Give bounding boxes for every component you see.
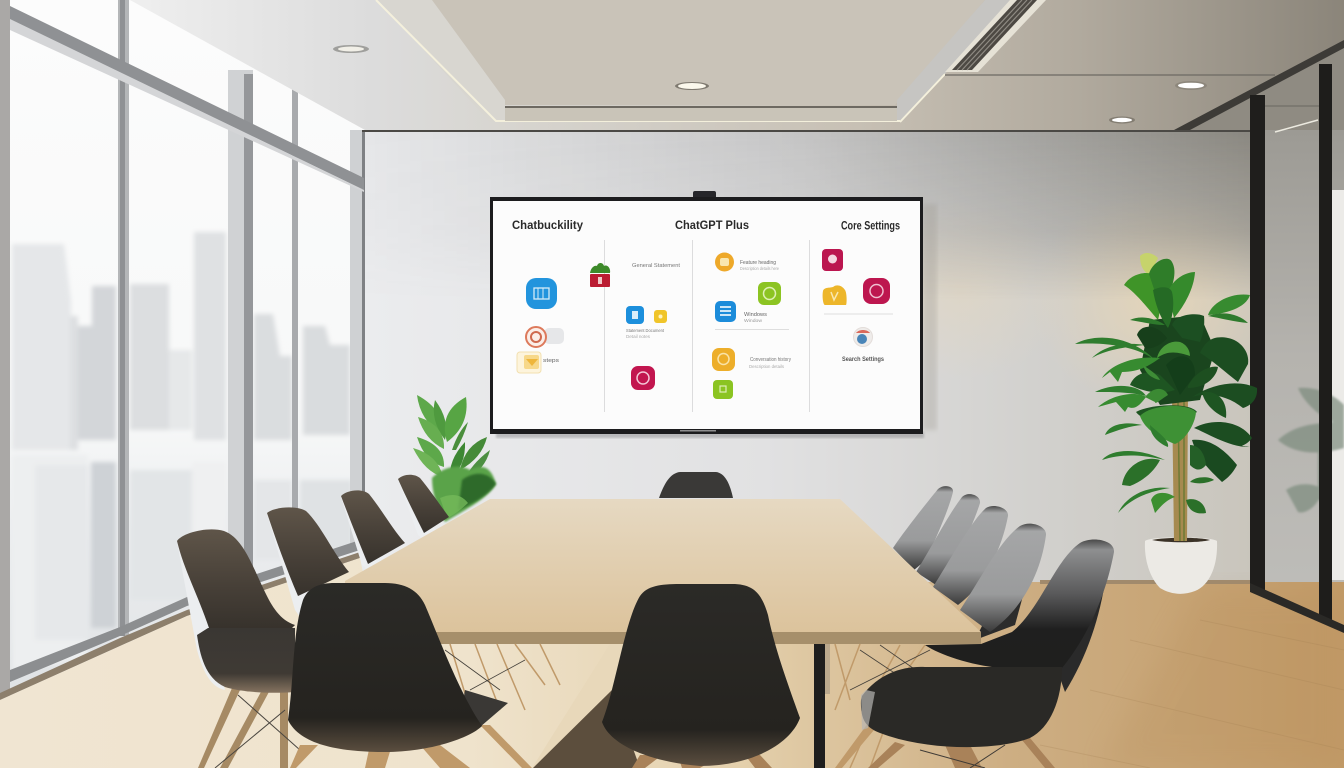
icon: blue stack [715, 301, 736, 322]
column dividers [604, 240, 810, 412]
table [344, 499, 981, 768]
back wall [365, 132, 1290, 582]
ceiling lights [333, 45, 1207, 124]
recess soffit front [505, 106, 897, 121]
chair: front center [602, 584, 800, 768]
screen content [512, 220, 900, 399]
window wall with city view [0, 0, 366, 700]
icon: yellow cup [517, 352, 541, 373]
chair: left row 2 [267, 507, 349, 620]
fronds [1075, 253, 1257, 513]
plant reflection [1278, 388, 1344, 513]
front chairs [288, 540, 1114, 768]
ceiling seam [945, 74, 1275, 76]
far side chairs [177, 472, 1046, 768]
icon: yellow home [823, 285, 847, 305]
table underside legs [532, 644, 830, 768]
label: feature two: Windows [744, 312, 768, 318]
icon: yellow key [654, 310, 667, 323]
chair: left row 3 [341, 490, 405, 572]
section rule [824, 313, 893, 315]
heading: ChatGPT Plus: ChatGPT Plus [675, 220, 749, 232]
label: feature three: Conversation history [750, 357, 791, 363]
label: general overview: General Statement [632, 263, 680, 269]
city skyline [12, 232, 352, 670]
icon: orange tile [712, 348, 735, 371]
chair: front left [288, 583, 532, 768]
black frame posts [1250, 95, 1265, 590]
label: section notes [626, 328, 665, 339]
icon: green tile [758, 282, 781, 305]
label: feature two [744, 312, 768, 323]
label: feature two: Window [744, 318, 763, 323]
icon: blue chat [526, 278, 557, 309]
label: steps: steps [543, 358, 559, 364]
chair: head of table [659, 472, 733, 498]
label: section notes: Detail notes [626, 334, 651, 339]
label: section notes: Statement Document [626, 328, 665, 334]
planter [1145, 537, 1217, 594]
icon: crimson shield [822, 249, 843, 271]
label: feature one: Feature heading [740, 260, 776, 266]
label: feature one [740, 260, 780, 271]
icon: crimson square [631, 366, 655, 390]
left plant [413, 395, 496, 522]
chairs: right row [893, 486, 1046, 640]
ceiling edge [362, 130, 1250, 132]
glass partition [1250, 64, 1344, 633]
lower sill [10, 540, 360, 682]
ceiling recess panel [428, 0, 985, 105]
icon: orange badge [526, 327, 564, 347]
chair: front right [835, 540, 1114, 768]
icon: potted sprout [590, 263, 610, 287]
upper transom [10, 6, 364, 190]
window mullions [0, 0, 365, 700]
air vent [900, 0, 1046, 122]
table edge [344, 632, 981, 644]
icon: blue document [626, 306, 644, 324]
label: search settings: Search Settings [842, 357, 885, 363]
wall display [490, 191, 937, 438]
floor [0, 558, 1344, 768]
heading: Chatbuckility: Chatbuckility [512, 220, 584, 232]
section rule [715, 328, 789, 330]
label: feature three: Description details [749, 364, 784, 369]
chair: left row 1 [177, 529, 300, 768]
wire chair bases [445, 644, 930, 768]
icon: orange circle [715, 252, 734, 272]
ceiling [130, 0, 1344, 131]
recess soffit right [897, 0, 1012, 120]
screen surface [493, 201, 920, 429]
icon: globe badge [854, 328, 872, 346]
icon: green small tile [713, 380, 733, 399]
icon: crimson brain [863, 278, 890, 304]
screen bezel [490, 197, 923, 434]
camera [693, 191, 716, 199]
label: feature three [749, 357, 791, 369]
chair: left row 4 [398, 475, 449, 540]
baseboard [1040, 580, 1255, 584]
label: feature one: Description details here [740, 266, 780, 271]
ceiling section beyond the glass line [1175, 40, 1344, 130]
table top [344, 499, 981, 632]
heading: Core Settings: Core Settings [841, 220, 900, 232]
trunk [1172, 395, 1188, 541]
recess soffit left [378, 0, 505, 122]
right plant [1075, 253, 1257, 594]
